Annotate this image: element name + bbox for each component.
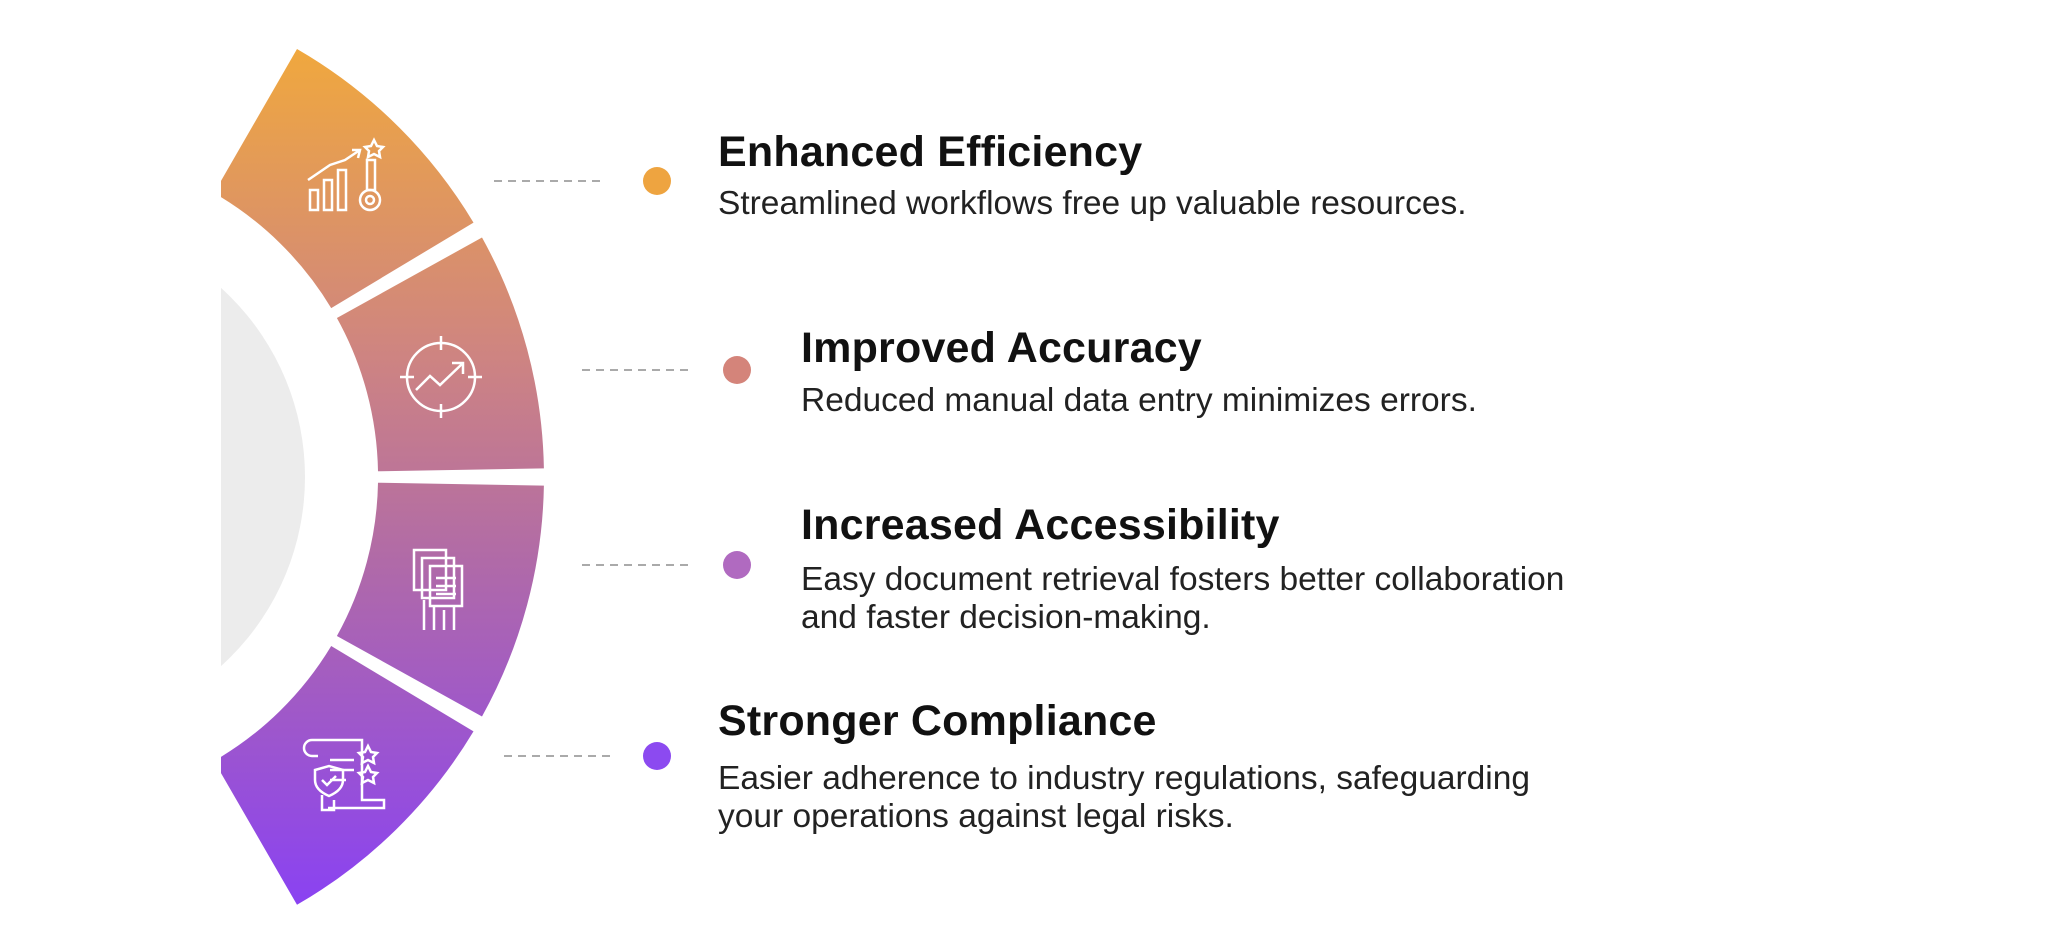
connectors (494, 181, 689, 756)
item 2 title: Improved Accuracy (801, 324, 1202, 372)
item 4 description (718, 760, 1530, 835)
segment 2 (337, 238, 544, 471)
item 1 description: Streamlined workflows free up valuable resources. (718, 185, 1467, 222)
item 4 description: your operations against legal risks. (718, 798, 1234, 835)
icon: accuracy target (400, 336, 482, 418)
item 3 description: Easy document retrieval fosters better collaboration (801, 561, 1564, 598)
item 2 description: Reduced manual data entry minimizes errors. (801, 382, 1477, 419)
item 4 description: Easier adherence to industry regulations, safeguarding (718, 760, 1530, 797)
segment 3 (337, 483, 544, 716)
item 4 title: Stronger Compliance (718, 697, 1157, 745)
icon: compliance (304, 740, 384, 810)
item 3 description (801, 561, 1564, 636)
arc diagram (221, 49, 751, 905)
segment 4 (214, 646, 474, 905)
item 3 description: and faster decision-making. (801, 599, 1211, 636)
item 3 title: Increased Accessibility (801, 501, 1280, 549)
item 1 title: Enhanced Efficiency (718, 128, 1142, 176)
gray inner semicircle (221, 288, 305, 666)
icon: efficiency chart (308, 140, 383, 210)
icon: documents (414, 550, 462, 630)
dots (643, 167, 751, 770)
segment 1 (214, 49, 474, 308)
